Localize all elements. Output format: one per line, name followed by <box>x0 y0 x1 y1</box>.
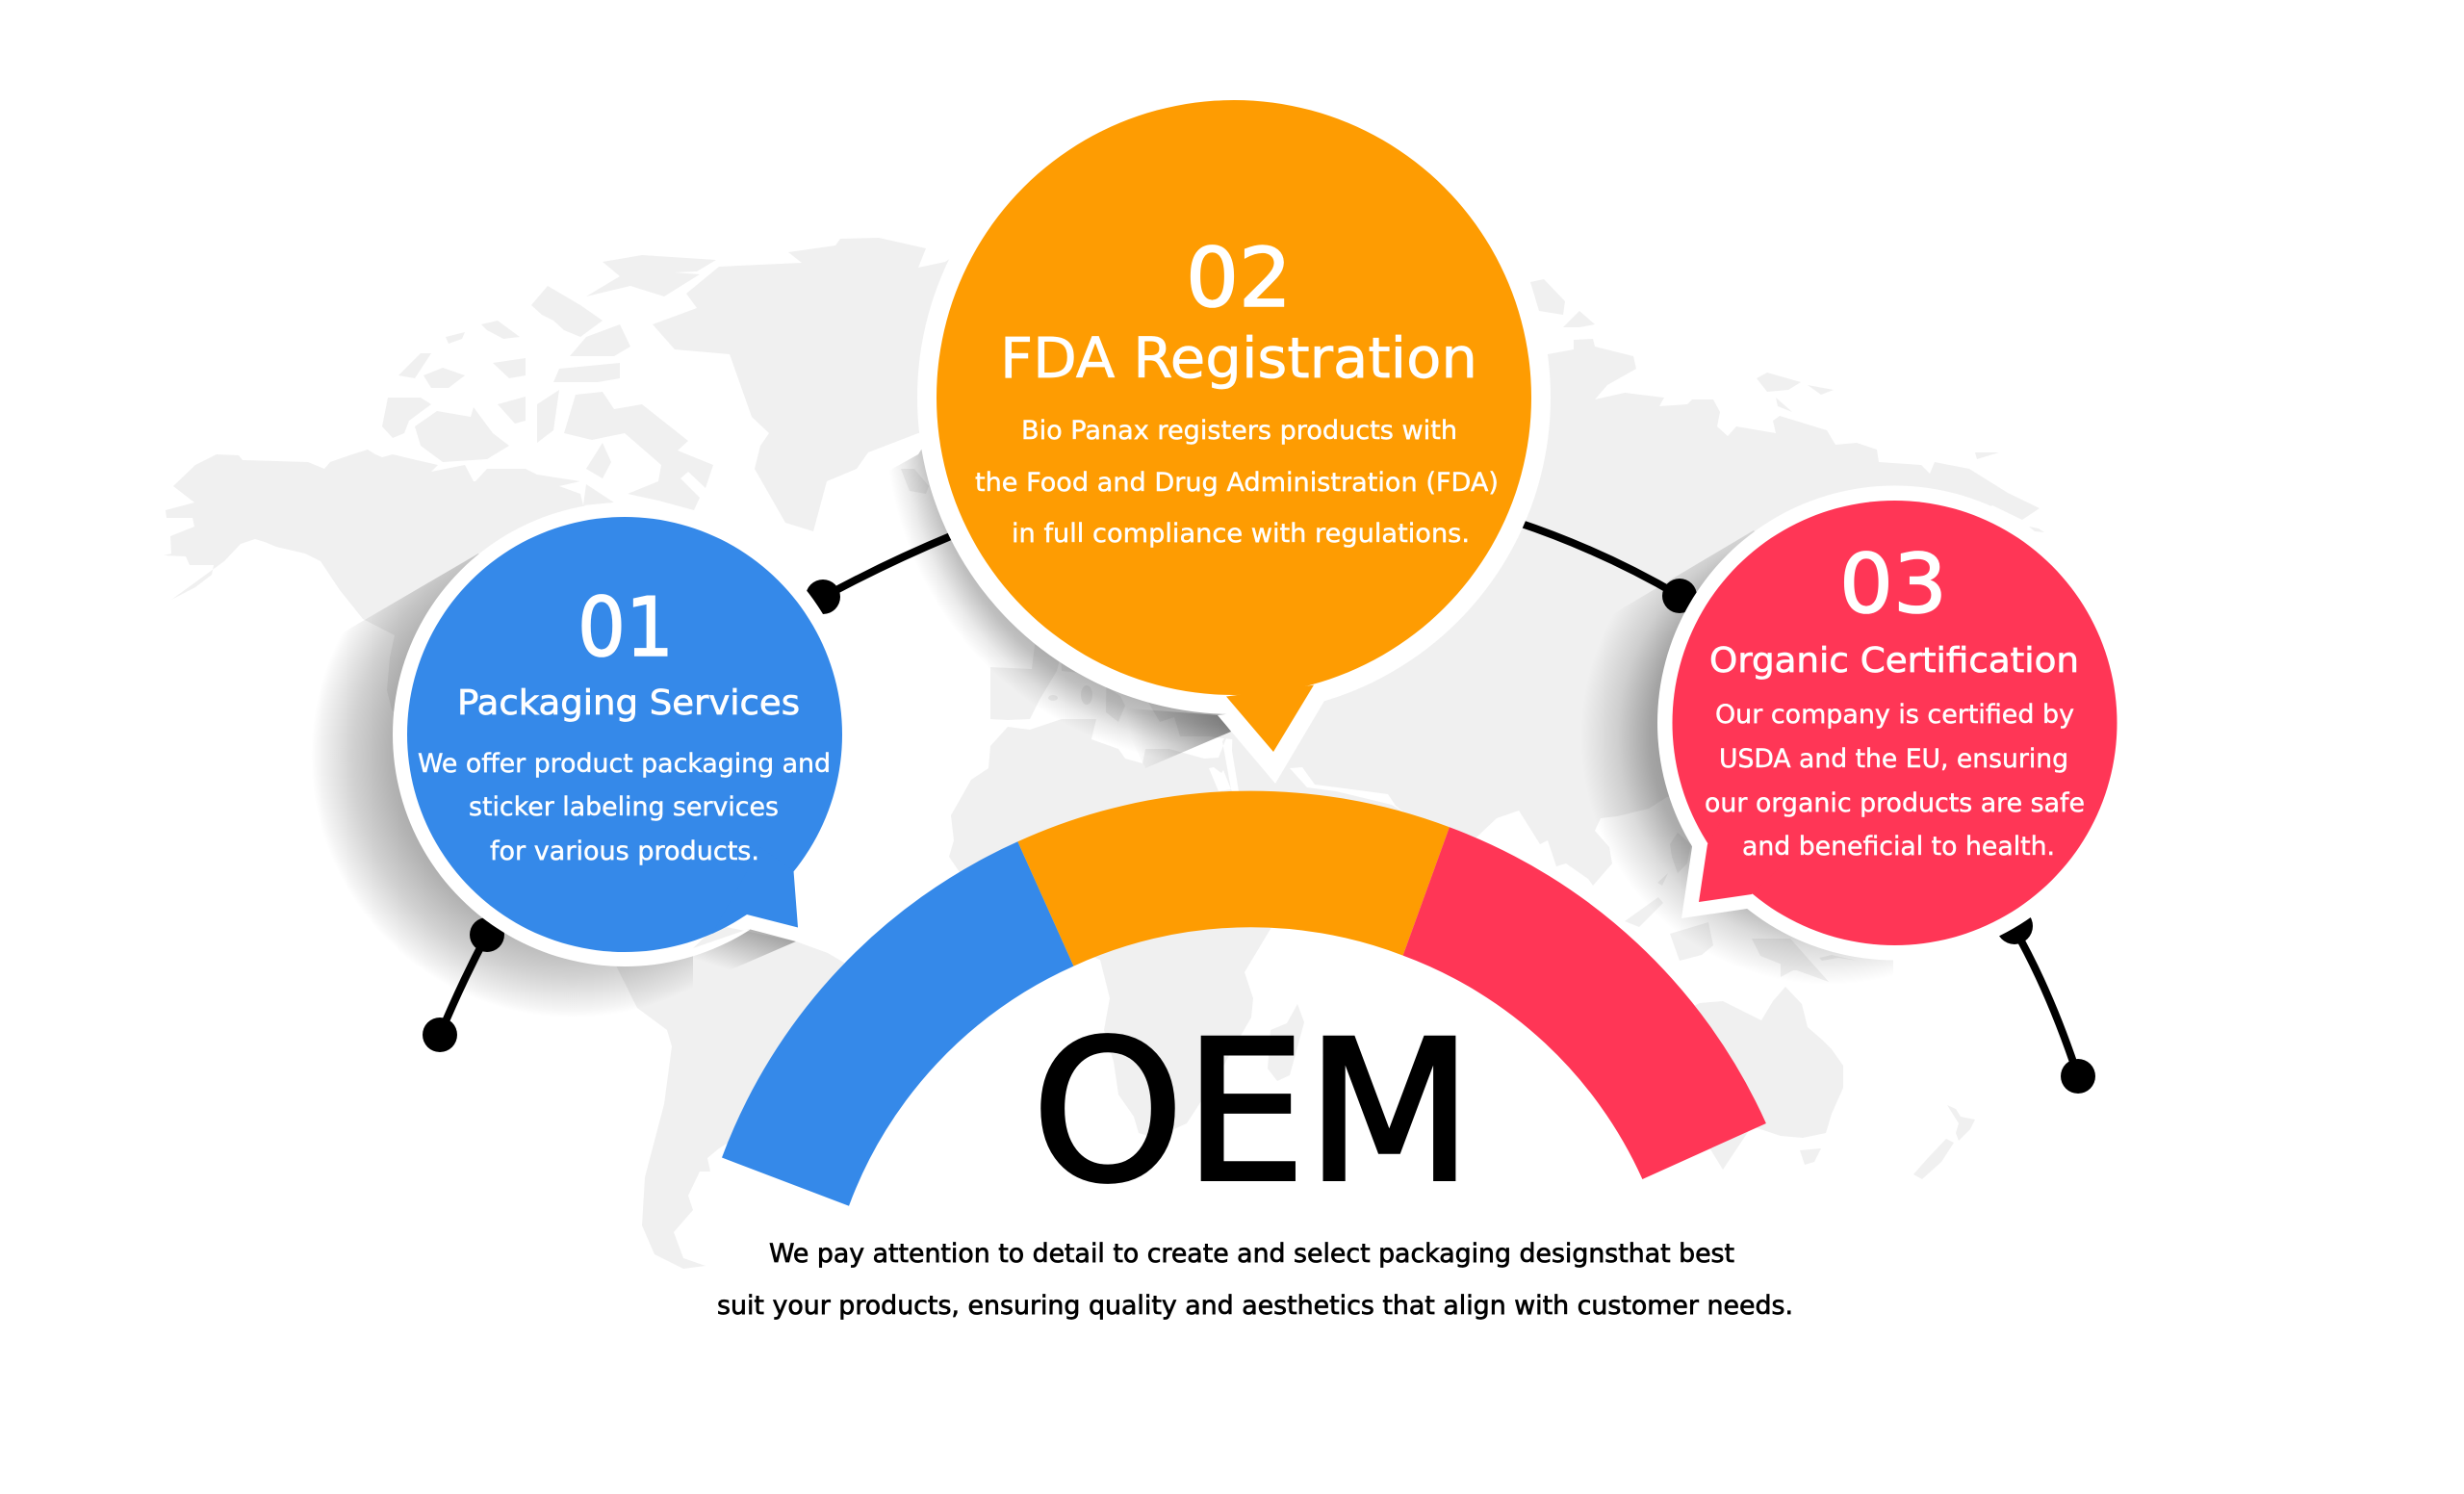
description text: suit your products, ensuring quality and aesthetics that align with customer needs. <box>717 1291 1793 1321</box>
body text: for various products. <box>490 837 759 866</box>
connector: below bubble 03 <box>1996 908 2095 1094</box>
heading: packaging services: Packaging Services <box>457 683 800 723</box>
world map background <box>164 238 2044 1269</box>
arch segment: orange <box>1017 791 1450 966</box>
connector: bubble 02 to bubble 03 <box>1516 522 1697 613</box>
body text: Bio Panax registers products with <box>1021 416 1457 446</box>
body text <box>975 416 1499 549</box>
heading: FDA registration: FDA Registration <box>1000 325 1477 391</box>
connector: below bubble 01 <box>423 917 504 1052</box>
body text: Our company is certified by <box>1715 700 2074 730</box>
body text: and beneficial to health. <box>1742 832 2055 862</box>
body text: in full compliance with regulations. <box>1012 519 1470 549</box>
arch segment: red <box>1403 827 1766 1179</box>
panel: bubble 01 packaging services <box>393 502 857 966</box>
connector: bubble 02 to bubble 01 <box>806 535 953 614</box>
body text: our organic products are safe <box>1705 788 2085 818</box>
description text: We pay attention to detail to create and select packaging designsthat best <box>769 1239 1734 1269</box>
panel: bubble 03 organic certification <box>1657 485 2132 961</box>
number 03: 03 <box>1839 537 1947 632</box>
body text <box>1705 700 2085 862</box>
heading: organic certification: Organic Certification <box>1709 641 2079 681</box>
number 01: 01 <box>578 580 674 676</box>
title: OEM: OEM <box>1032 998 1473 1225</box>
number 02: 02 <box>1186 231 1292 326</box>
OEM arch <box>722 791 1766 1206</box>
body text: USDA and the EU, ensuring <box>1719 744 2068 774</box>
description text <box>717 1239 1793 1321</box>
shadow: bubble 03 <box>1590 530 1893 976</box>
body text: sticker labeling services <box>469 792 779 822</box>
arch segment: blue <box>722 841 1074 1206</box>
body text: We offer product packaging and <box>418 749 831 779</box>
body text: the Food and Drug Administration (FDA) <box>975 468 1499 498</box>
panel: bubble 02 FDA registration <box>917 81 1551 784</box>
shadow: bubble 01 <box>311 494 834 1017</box>
shadow: bubble 02 <box>895 449 1231 766</box>
body text <box>418 749 831 866</box>
